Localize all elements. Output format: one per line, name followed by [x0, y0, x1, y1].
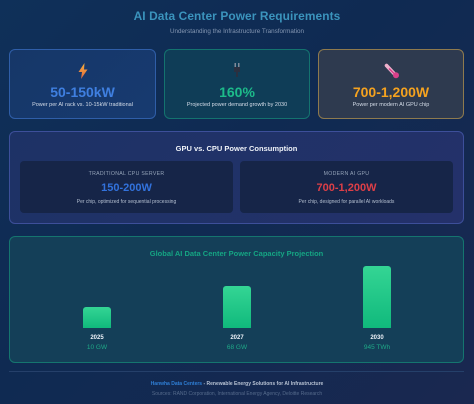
value: 2027: 68 GW: [227, 344, 247, 350]
stat: rack power: 50-150kW: [50, 84, 115, 100]
panel: CPU server: [20, 161, 233, 213]
icon: plug: [234, 63, 240, 77]
bar: 2030: [363, 266, 391, 328]
panel: AI GPU: [240, 161, 453, 213]
stat: demand growth: 160%: [219, 84, 255, 100]
label: CPU: TRADITIONAL CPU SERVER: [89, 170, 164, 176]
heading: comparison: GPU vs. CPU Power Consumption: [176, 144, 297, 152]
caption: GPU: Per chip, designed for parallel AI workloads: [299, 198, 394, 204]
value: 2025: 10 GW: [87, 344, 107, 350]
footer: sources: Sources: RAND Corporation, International Energy Agency, Deloitte Research: [152, 390, 322, 396]
stat: chip power: 700-1,200W: [353, 84, 429, 100]
caption: demand growth: Projected power demand growth by 2030: [187, 102, 287, 108]
icon: lightning bolt: [78, 63, 88, 79]
panel: GPU vs CPU comparison: [9, 131, 464, 224]
stat: GPU watts: 700-1,200W: [317, 182, 376, 194]
bar: 2027: [223, 286, 251, 328]
bar: 2025: [83, 307, 111, 328]
panel: capacity projection: [9, 236, 464, 363]
panel: GPU chip power card: [318, 49, 464, 119]
value: 2030: 945 TWh: [364, 344, 390, 350]
panel: rack power card: [9, 49, 156, 119]
caption: CPU: Per chip, optimized for sequential processing: [77, 198, 176, 204]
panel: demand growth card: [164, 49, 310, 119]
title: AI Data Center Power Requirements: [134, 9, 340, 23]
label: 2025: 2025: [90, 334, 104, 340]
label: GPU: MODERN AI GPU: [324, 170, 369, 176]
heading: projection: Global AI Data Center Power Capacity Projection: [150, 248, 323, 258]
footer: attribution: Hanwha Data Centers - Renewable Energy Solutions for AI Infrastructure: [151, 380, 323, 386]
caption: chip power: Power per modern AI GPU chip: [353, 102, 429, 108]
label: 2027: 2027: [230, 334, 244, 340]
label: 2030: 2030: [370, 334, 384, 340]
subtitle: Understanding the Infrastructure Transformation: [170, 28, 304, 34]
stat: CPU watts: 150-200W: [101, 182, 152, 194]
icon: thermometer: [384, 64, 399, 78]
caption: rack power: Power per AI rack vs. 10-15kW traditional: [32, 102, 133, 108]
